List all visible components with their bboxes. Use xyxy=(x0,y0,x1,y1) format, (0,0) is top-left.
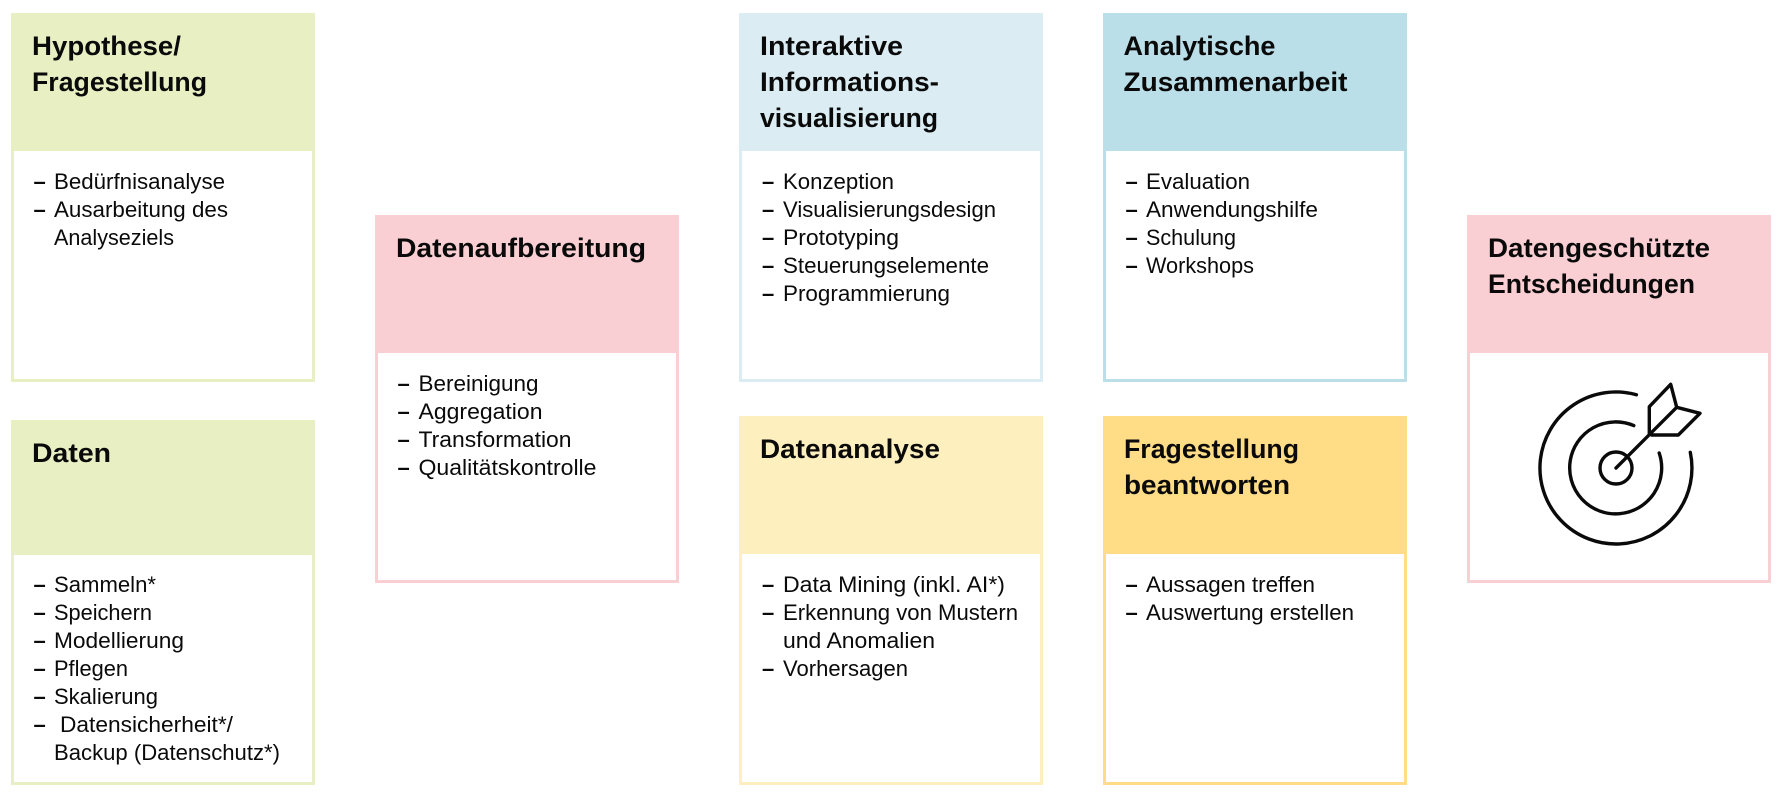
heading: Analytische Zusammenarbeit xyxy=(1124,31,1348,97)
list: Daten items: – xyxy=(34,600,46,625)
list: Datenaufbereitung items: Transformation xyxy=(418,427,572,452)
list: Daten items xyxy=(34,572,280,765)
heading: Datenaufbereitung: Datenaufbereitung xyxy=(396,233,646,263)
list: Daten items: Backup (Datenschutz*) xyxy=(54,740,280,765)
list: Analytische items: – xyxy=(1126,197,1138,222)
heading: Analytische Zusammenarbeit: Analytische xyxy=(1124,31,1276,61)
list: Datenaufbereitung items: Bereinigung xyxy=(418,371,538,396)
list: Analytische items: Anwendungshilfe xyxy=(1146,197,1318,222)
list: Daten items: Speichern xyxy=(54,600,152,625)
heading: Fragestellung beantworten: Fragestellung xyxy=(1124,434,1299,464)
list: Datenanalyse items: – xyxy=(762,572,774,597)
list: Daten items: Sammeln* xyxy=(54,572,156,597)
list: Analytische items: – xyxy=(1126,225,1138,250)
list: Interaktive items: – xyxy=(762,169,774,194)
list: Fragestellung items: – xyxy=(1126,572,1138,597)
list: Datenanalyse items: Data Mining (inkl. AI*) xyxy=(783,572,1005,597)
list: Analytische items xyxy=(1126,169,1318,278)
list: Fragestellung items: – xyxy=(1126,600,1138,625)
list: Interaktive items: – xyxy=(762,225,774,250)
panel: Daten xyxy=(11,420,315,785)
heading: Analytische Zusammenarbeit: Zusammenarbeit xyxy=(1124,67,1348,97)
heading: Interaktive Informationsvisualisierung xyxy=(760,31,939,133)
list: Analytische items: – xyxy=(1126,253,1138,278)
list: Interaktive items: – xyxy=(762,253,774,278)
list: Interaktive items: Steuerungselemente xyxy=(783,253,989,278)
list: Analytische items: – xyxy=(1126,169,1138,194)
list: Interaktive items: Visualisierungsdesign xyxy=(783,197,996,222)
list: Daten items: – xyxy=(34,656,46,681)
list: Daten items: – xyxy=(34,628,46,653)
list: Fragestellung items: Auswertung erstellen xyxy=(1146,600,1354,625)
list: Interaktive items: Programmierung xyxy=(783,281,950,306)
list: Datenanalyse items: Vorhersagen xyxy=(783,656,908,681)
list: Datenanalyse items: – xyxy=(762,600,774,625)
list: Hypothese items: – xyxy=(34,197,46,222)
list: Daten items: – xyxy=(34,712,46,737)
list: Interaktive items: Prototyping xyxy=(783,225,899,250)
heading: Datengeschützte Entscheidungen xyxy=(1488,233,1710,299)
list: Fragestellung items: Aussagen treffen xyxy=(1146,572,1315,597)
heading: Hypothese/Fragestellung xyxy=(32,31,207,97)
heading: Interaktive Informationsvisualisierung: Interaktive xyxy=(760,31,903,61)
list: Hypothese items: Analyseziels xyxy=(54,225,174,250)
heading: Interaktive Informationsvisualisierung: visualisierung xyxy=(760,103,938,133)
list: Datenaufbereitung items: – xyxy=(398,371,410,396)
list: Datenaufbereitung items: – xyxy=(398,399,410,424)
heading: Fragestellung beantworten xyxy=(1124,434,1299,500)
list: Datenaufbereitung items: Aggregation xyxy=(418,399,542,424)
list: Datenanalyse items: – xyxy=(762,656,774,681)
panel: Datenaufbereitung xyxy=(375,215,679,583)
list: Analytische items: Workshops xyxy=(1146,253,1254,278)
list: Interaktive items: – xyxy=(762,281,774,306)
panel: Fragestellung beantworten xyxy=(1103,416,1407,785)
list: Interaktive items xyxy=(762,169,996,306)
list: Fragestellung items xyxy=(1126,572,1354,625)
panel: Hypothese/Fragestellung xyxy=(11,13,315,382)
panel: Datengeschützte Entscheidungen xyxy=(1467,215,1771,583)
list: Datenaufbereitung items: Qualitätskontrolle xyxy=(418,455,596,480)
list: Hypothese items: Bedürfnisanalyse xyxy=(54,169,225,194)
list: Daten items: Pflegen xyxy=(54,656,128,681)
list: Daten items: – xyxy=(34,684,46,709)
list: Daten items: Modellierung xyxy=(54,628,184,653)
list: Datenanalyse items: und Anomalien xyxy=(783,628,935,653)
list: Daten items: – xyxy=(34,572,46,597)
list: Interaktive items: Konzeption xyxy=(783,169,894,194)
list: Datenanalyse items: Erkennung von Mustern xyxy=(783,600,1018,625)
heading: Hypothese/Fragestellung: Fragestellung xyxy=(32,67,207,97)
panel: Datenanalyse xyxy=(739,416,1043,785)
list: Analytische items: Schulung xyxy=(1146,225,1236,250)
list: Hypothese items: – xyxy=(34,169,46,194)
list: Analytische items: Evaluation xyxy=(1146,169,1250,194)
heading: Daten: Daten xyxy=(32,438,111,468)
list: Datenanalyse items xyxy=(762,572,1018,681)
list: Daten items: Datensicherheit*/ xyxy=(60,712,234,737)
heading: Datenanalyse: Datenanalyse xyxy=(760,434,940,464)
panel: Interaktive Informationsvisualisierung xyxy=(739,13,1043,382)
panel: Analytische Zusammenarbeit xyxy=(1103,13,1407,382)
heading: Fragestellung beantworten: beantworten xyxy=(1124,470,1290,500)
heading: Datengeschützte Entscheidungen: Datengeschützte xyxy=(1488,233,1710,263)
list: Daten items: Skalierung xyxy=(54,684,158,709)
list: Hypothese items: Ausarbeitung des xyxy=(54,197,228,222)
heading: Interaktive Informationsvisualisierung: Informations- xyxy=(760,67,939,97)
list: Datenaufbereitung items xyxy=(398,371,596,480)
list: Interaktive items: – xyxy=(762,197,774,222)
heading: Hypothese/Fragestellung: Hypothese/ xyxy=(32,31,181,61)
list: Datenaufbereitung items: – xyxy=(398,455,410,480)
list: Datenaufbereitung items: – xyxy=(398,427,410,452)
heading: Datengeschützte Entscheidungen: Entscheidungen xyxy=(1488,269,1695,299)
list: Hypothese items xyxy=(34,169,228,250)
icon: target with dart xyxy=(1540,384,1700,544)
